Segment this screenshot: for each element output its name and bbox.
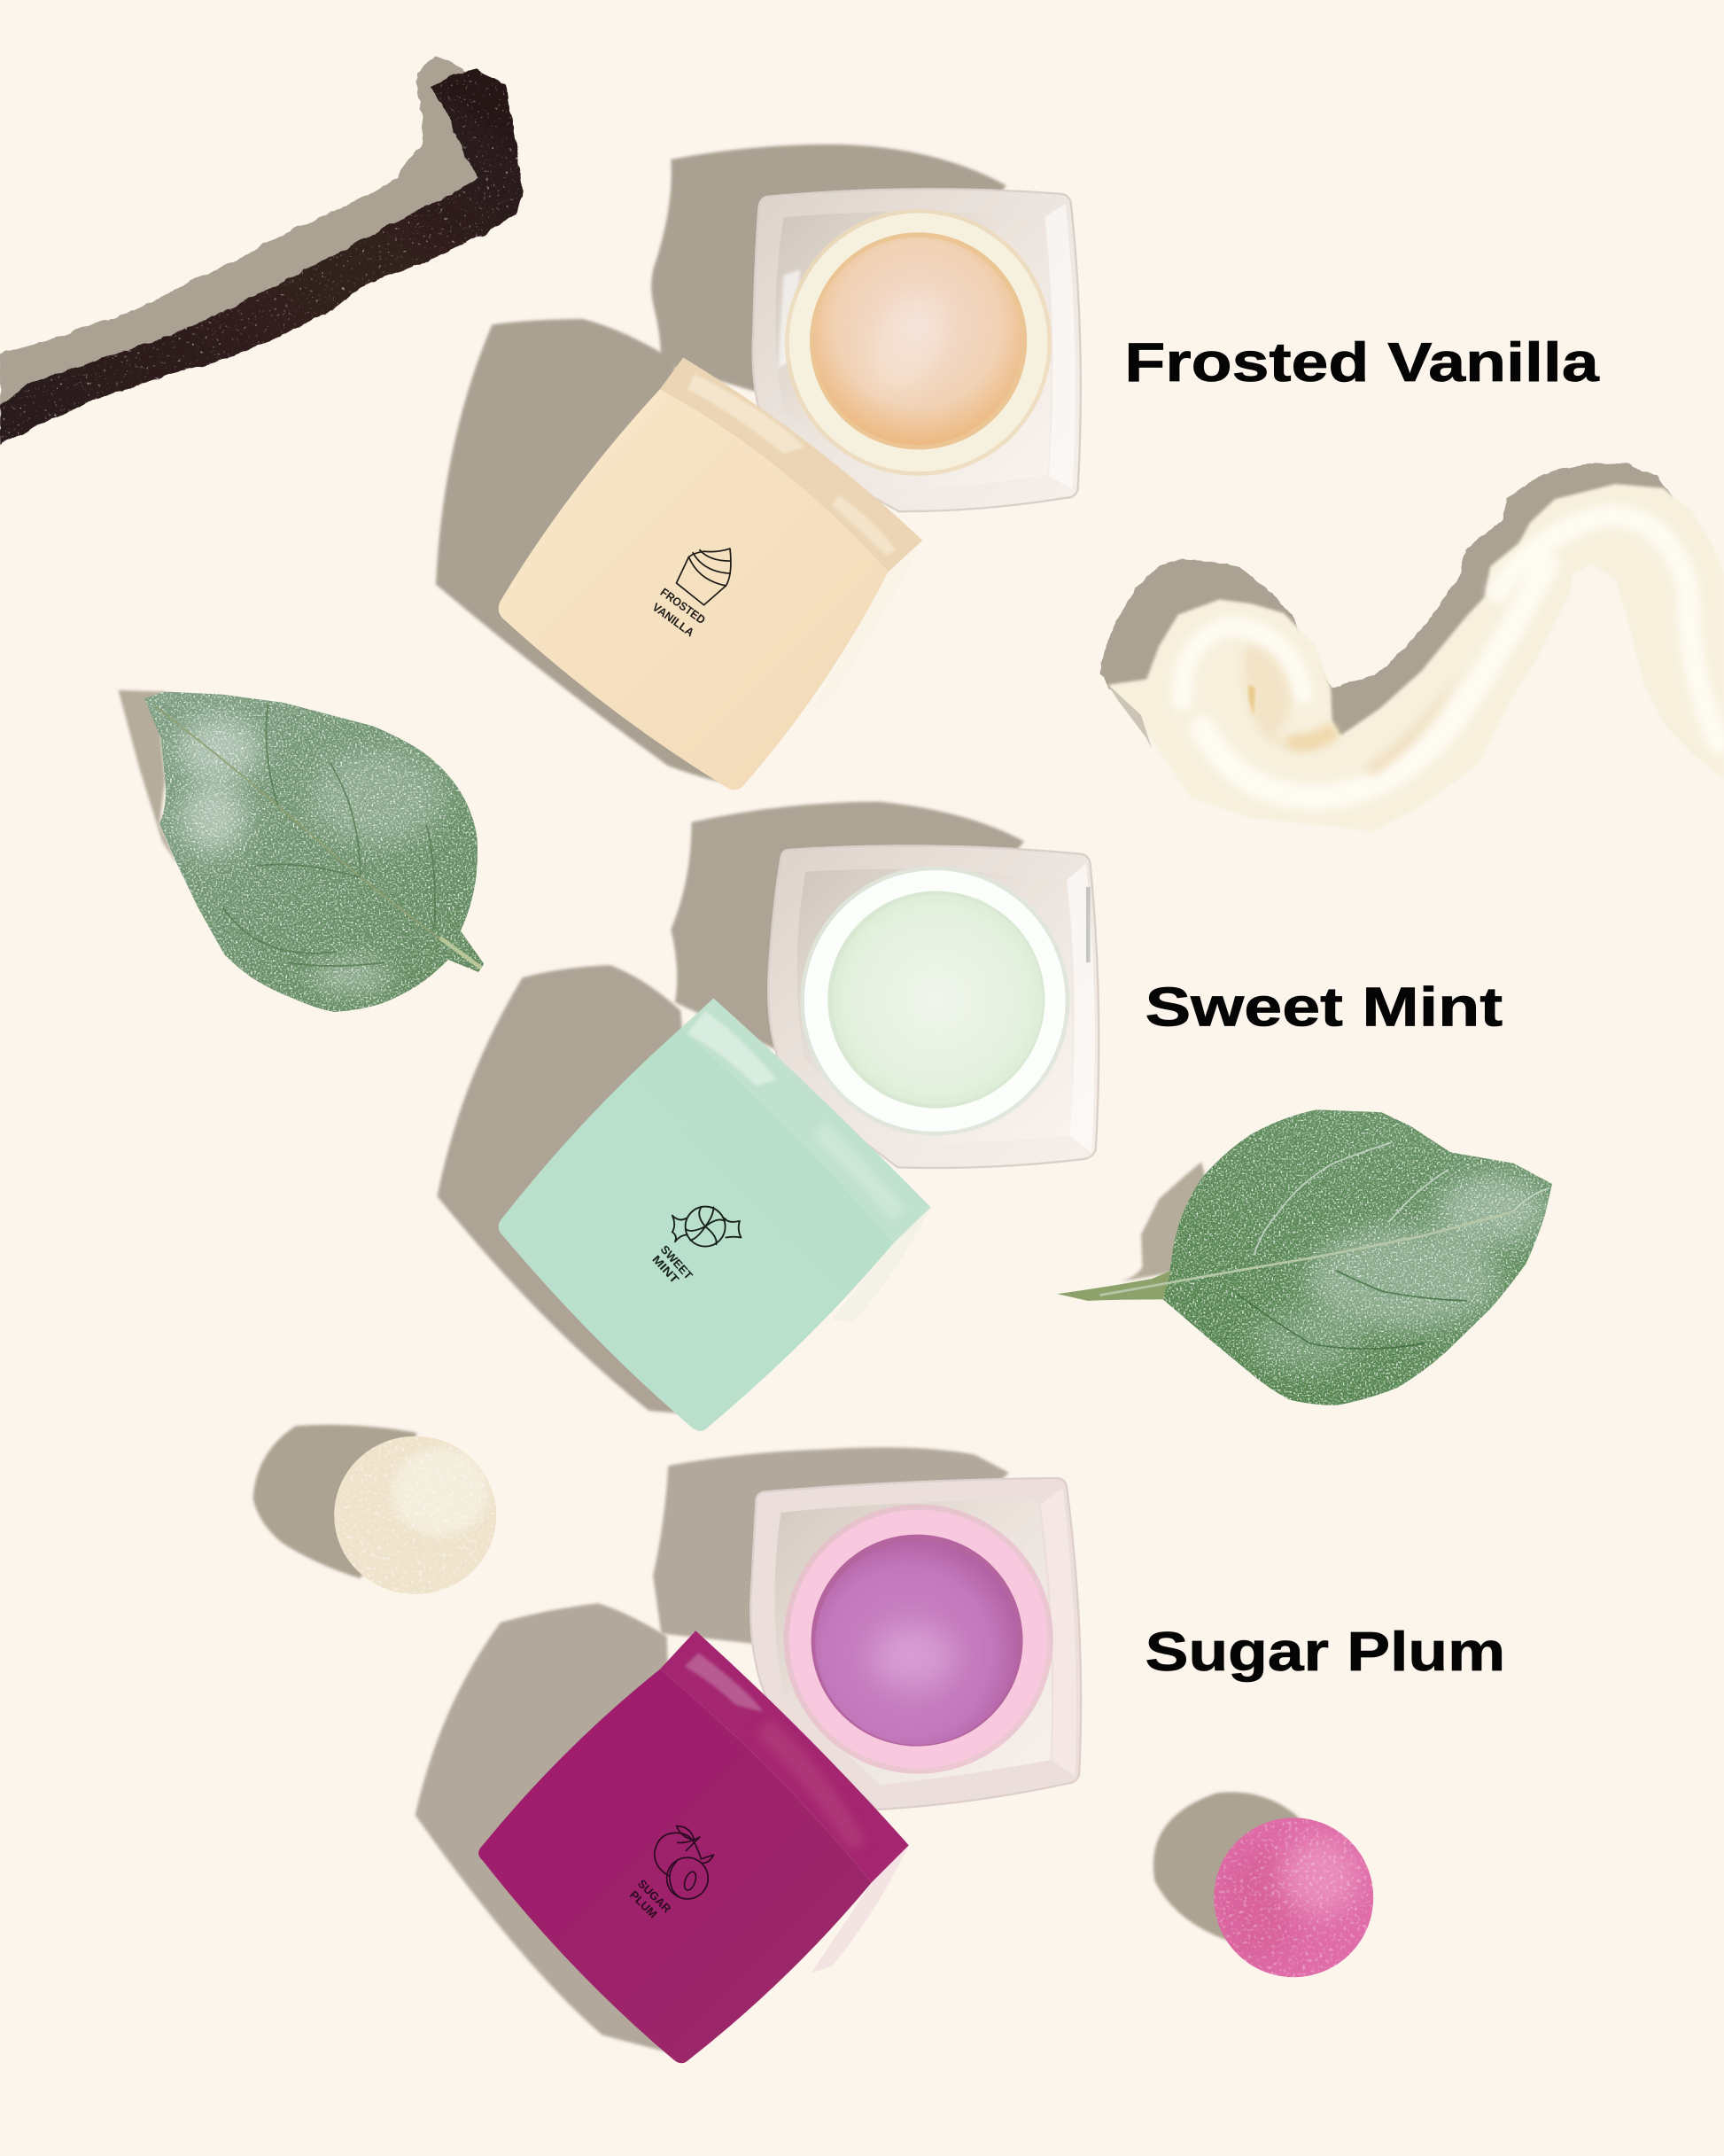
- lid label: SUGAR PLUM: PLUM: [627, 1887, 660, 1920]
- glass jar: plum: [750, 1478, 1081, 1810]
- lip balm pot: mint: [800, 867, 1069, 1136]
- glass jar: mint: [768, 845, 1099, 1168]
- vanilla pod with shadow: [0, 55, 529, 454]
- leaf: left mint leaf: [119, 681, 495, 1024]
- jar shadow: mint: [671, 802, 1024, 1072]
- jar shadow: plum: [653, 1447, 1009, 1650]
- frosting swirl with shadow: [1099, 463, 1724, 832]
- product group: Sugar Plum: [415, 1447, 1081, 2063]
- product group: Frosted Vanilla: [436, 144, 1081, 790]
- lid label: SWEET MINT: MINT: [649, 1252, 681, 1286]
- lip balm pot: vanilla: [785, 209, 1052, 476]
- icon: cupcake: [677, 549, 731, 605]
- lid: plum: [478, 1631, 909, 2063]
- frosting highlight ribbons: [1182, 516, 1719, 798]
- icon: plum: [655, 1826, 713, 1899]
- flavour title: Frosted Vanilla: Frosted Vanilla: [1124, 332, 1599, 393]
- lid label: FROSTED VANILLA: [650, 585, 708, 640]
- flavour title: Sweet Mint: Sweet Mint: [1145, 977, 1503, 1039]
- gummy: pink sugar candy: [1153, 1792, 1380, 1986]
- lid: vanilla: [499, 357, 922, 790]
- flavour title: Sugar Plum: Sugar Plum: [1145, 1622, 1505, 1683]
- gummy: vanilla sugar candy: [253, 1425, 501, 1600]
- lid shadow: mint: [438, 965, 715, 1416]
- lid shadow: plum: [415, 1603, 680, 2056]
- lid shadow: vanilla: [436, 319, 728, 783]
- lid label: SUGAR PLUM: SUGAR: [635, 1877, 674, 1916]
- lid label: SWEET MINT: SWEET: [658, 1242, 695, 1282]
- jar shadow: vanilla: [651, 144, 1006, 412]
- glass jar: vanilla: [753, 189, 1081, 511]
- lid label: FROSTED VANILLA: VANILLA: [650, 600, 697, 640]
- product group: Sweet Mint: [438, 802, 1099, 1431]
- icon: wrapped candy: [672, 1207, 741, 1247]
- lid: mint: [499, 999, 931, 1431]
- lip balm pot: plum: [784, 1505, 1053, 1774]
- leaf: right mint leaf: [1058, 1109, 1552, 1405]
- lid label: FROSTED VANILLA: FROSTED: [658, 585, 708, 627]
